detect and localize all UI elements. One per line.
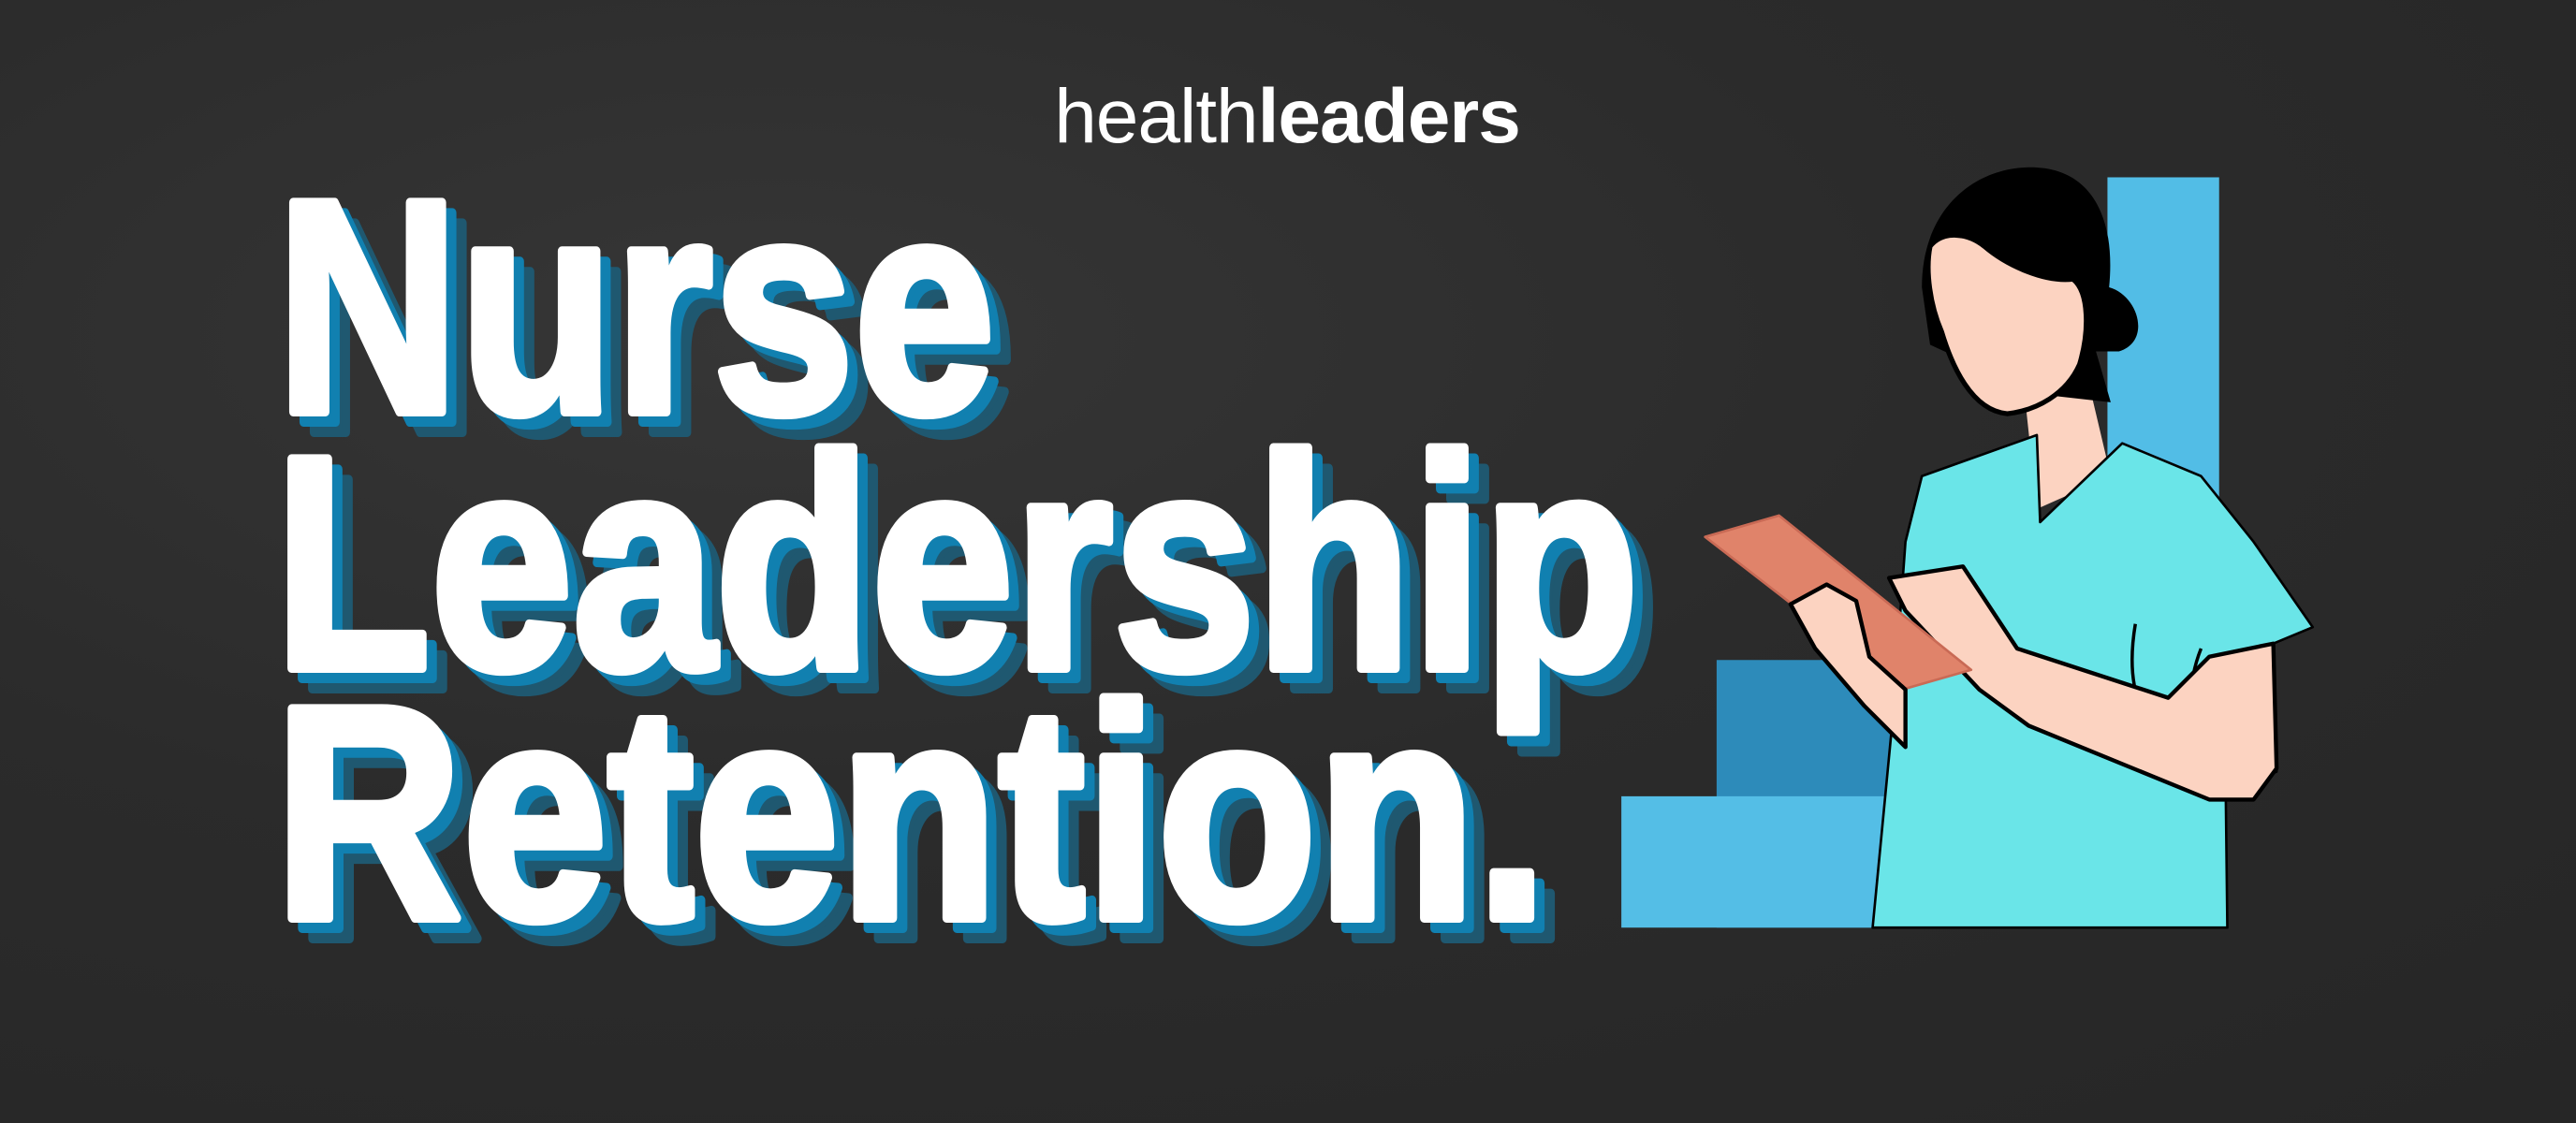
right arm [1889,566,2276,799]
shadow blue layer: Leadership [285,403,1649,745]
hair [1922,168,2138,402]
bar steps [1621,177,2219,927]
shadow dark layer: Leadership [295,414,1660,755]
logo: healthleaders: healthleaders [1054,74,1520,159]
white title text [274,137,1639,983]
shadow blue layer [285,147,1649,993]
neck [2024,386,2111,509]
face [1928,235,2086,414]
shadow dark layer: Nurse [297,157,1016,497]
scrub fold lines [2132,624,2209,772]
shadow blue layer: Retention. [285,653,1559,993]
white title text: Leadership [274,393,1639,735]
left hand [1791,585,1906,747]
tablet [1705,516,1971,690]
nurse figure [1705,168,2313,927]
scrubs [1873,435,2313,927]
white title text: Nurse [276,137,995,476]
white title text: Retention. [274,643,1548,983]
shadow dark layer: Retention. [295,664,1569,1003]
shadow dark layer [295,157,1660,1003]
shadow blue layer: Nurse [286,147,1005,487]
